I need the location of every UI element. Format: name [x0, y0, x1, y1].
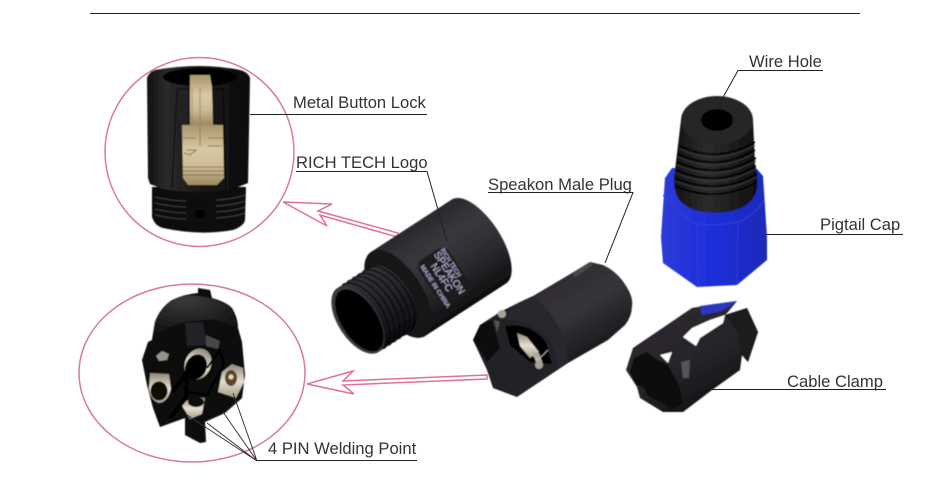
arrow: from socket to lock detail [283, 202, 398, 237]
silver pin right [218, 364, 244, 398]
icon: housing with metal lock [147, 66, 250, 233]
label: rich tech logo: RICH TECH Logo [296, 153, 428, 172]
panel: metal button lock detail circle [105, 58, 294, 246]
silver pin bottom [181, 398, 205, 419]
label: rich tech logo [296, 153, 447, 241]
icon: rear view of plug with pins [142, 288, 245, 443]
icon: cable clamp [626, 301, 758, 412]
logo text on housing [417, 248, 472, 310]
logo text on housing: RICH TECH [438, 248, 461, 278]
logo text on housing: NL4FC [428, 262, 454, 294]
silver pin left [149, 373, 171, 403]
logo text on housing: MADE IN CHINA [418, 264, 451, 310]
label: 4 pin welding point [187, 393, 417, 461]
label: pigtail cap [766, 215, 903, 234]
top rule [90, 12, 860, 14]
label: wire hole [717, 52, 823, 108]
silver pin top [179, 344, 217, 384]
label: pigtail cap: Pigtail Cap [820, 215, 900, 234]
icon: speakon male plug [473, 262, 632, 397]
label: speakon male plug: Speakon Male Plug [488, 175, 632, 194]
icon: blue pigtail cap [661, 96, 767, 287]
icon: threaded socket housing [314, 188, 524, 373]
logo text on housing: SPEAKON [431, 250, 466, 297]
label: metal button lock: Metal Button Lock [293, 93, 427, 112]
label: 4 pin welding point: 4 PIN Welding Point [268, 439, 417, 458]
panel: 4 pin welding point detail ellipse [79, 284, 305, 462]
label: speakon male plug [488, 175, 633, 263]
arrow: from plug to pin detail [307, 371, 487, 394]
label: wire hole: Wire Hole [749, 52, 822, 71]
label: cable clamp: Cable Clamp [787, 372, 883, 391]
